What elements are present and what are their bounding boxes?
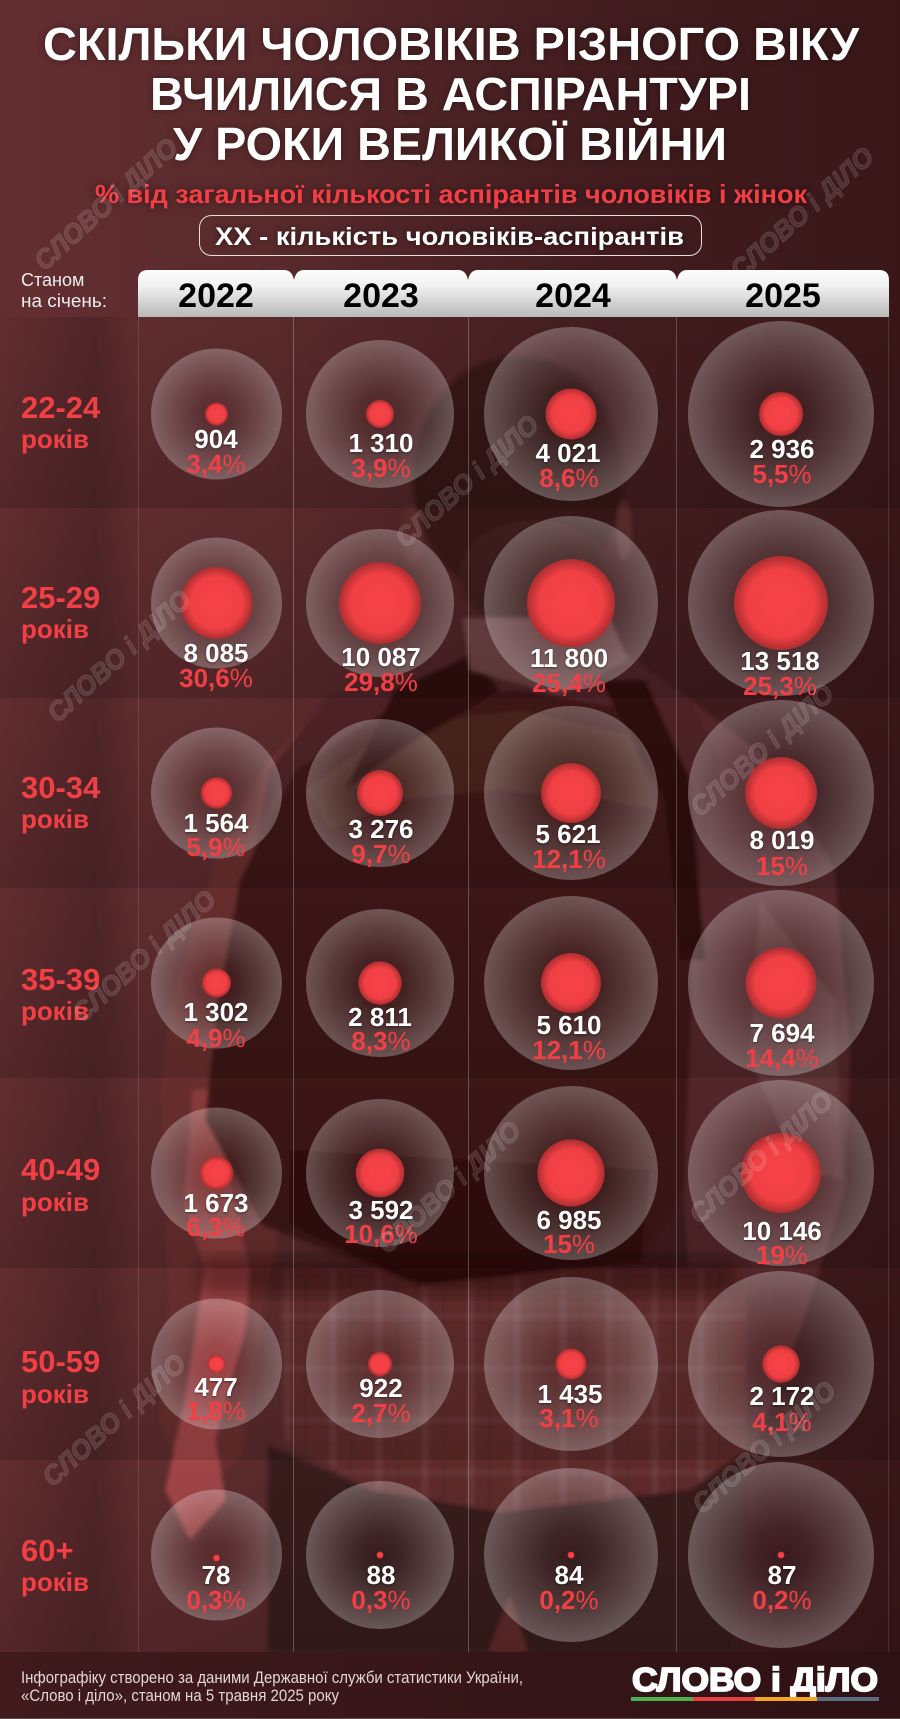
bubble 2022 [151, 1490, 282, 1620]
bubble 2023 [306, 909, 454, 1057]
row 30-34 [21, 700, 874, 886]
subtitle: % від загальної кількості аспірантів чоловіків і жінок [95, 179, 808, 209]
bubble 2022: 8 085 [183, 638, 249, 668]
bubble 2025 [688, 1271, 874, 1457]
bubble 2023 [306, 340, 454, 488]
age label: 30-34 [21, 770, 101, 805]
footer band [0, 1652, 900, 1719]
bubble 2023: 1 310 [348, 428, 414, 458]
bubble 2023 [306, 1290, 454, 1438]
age label [21, 1533, 89, 1597]
watermarks: СЛОВО і ДІЛО [683, 1085, 839, 1229]
age label [21, 770, 101, 834]
bubble 2022: 78 [202, 1560, 230, 1590]
bubble 2025 [688, 1080, 874, 1270]
age label: років [21, 1567, 89, 1597]
bubble 2023: 3,9% [351, 453, 411, 483]
row bands [0, 317, 900, 1652]
bubble 2025: 0,2% [752, 1585, 812, 1615]
bubble 2024: 25,4% [532, 668, 606, 698]
header 2024: 2024 [535, 277, 611, 315]
bubble 2023: 10,6% [344, 1219, 418, 1249]
header 2025 [677, 270, 889, 317]
header 2023 [294, 270, 468, 317]
bubble 2023: 922 [359, 1373, 403, 1403]
bubble 2025: 13 518 [740, 646, 820, 676]
bubble 2025: 5,5% [752, 459, 812, 489]
bubble 2023: 8,3% [351, 1026, 411, 1056]
note: as of January: на січень: [21, 291, 107, 311]
bubble 2024: 6 985 [536, 1205, 602, 1235]
bubble 2022: 904 [194, 424, 238, 454]
title: У РОКИ ВЕЛИКОЇ ВІЙНИ [173, 118, 727, 170]
bubble 2024: 1 435 [537, 1379, 603, 1409]
note: as of January: Станом [21, 270, 84, 290]
bubble 2023: 88 [367, 1560, 395, 1590]
bubble 2024 [484, 516, 658, 698]
bubble 2024: 12,1% [532, 1035, 606, 1065]
bubble 2023 [306, 1099, 454, 1249]
bubble 2024: 4 021 [535, 438, 601, 468]
watermarks: СЛОВО і ДІЛО [28, 132, 184, 276]
age label: років [21, 424, 89, 454]
bubble 2022: 30,6% [179, 663, 253, 693]
row 25-29 [21, 510, 874, 701]
bubble 2025 [688, 700, 874, 886]
age label: 40-49 [21, 1152, 100, 1187]
age label [21, 390, 101, 454]
bubble 2023 [306, 1481, 454, 1629]
bubble 2022: 1,8% [186, 1396, 246, 1426]
bubble 2024: 84 [555, 1560, 584, 1590]
watermarks: СЛОВО і ДІЛО [66, 884, 222, 1028]
bubble 2023 [306, 719, 454, 869]
bubble 2023: 3 592 [348, 1195, 414, 1225]
background photo: student with backpack [160, 356, 850, 1652]
bubble 2023: 2,7% [351, 1398, 411, 1428]
bubble 2025: 14,4% [745, 1043, 819, 1073]
bubble 2022: 6,3% [186, 1212, 246, 1242]
age label: років [21, 804, 89, 834]
bubble 2025: 15% [756, 851, 808, 881]
bubble 2022 [151, 918, 282, 1053]
header 2024 [468, 270, 677, 317]
note: as of January [21, 270, 107, 311]
bubble 2025: 25,3% [743, 671, 817, 701]
age label: 22-24 [21, 390, 101, 425]
age label [21, 1344, 100, 1409]
watermarks: СЛОВО і ДІЛО [684, 678, 840, 822]
watermarks: СЛОВО і ДІЛО [371, 1115, 527, 1259]
bubble 2022: 1 673 [183, 1188, 249, 1218]
bubble 2024 [484, 1277, 658, 1451]
age label: 60+ [21, 1533, 74, 1568]
bubble 2024 [484, 327, 658, 501]
bubble 2024: 8,6% [539, 463, 599, 493]
bubble 2024 [484, 1468, 658, 1642]
bubble 2023: 0,3% [351, 1585, 411, 1615]
bubble 2023: 9,7% [351, 839, 411, 869]
row 40-49 [21, 1080, 874, 1270]
bubble 2022: 1 302 [183, 997, 249, 1027]
age label: років [21, 1187, 89, 1217]
bubble 2022: 5,9% [186, 832, 246, 862]
bubble 2022 [151, 348, 282, 480]
bubble 2022 [151, 1108, 282, 1242]
bubble 2025 [688, 1462, 874, 1648]
year header [138, 270, 889, 317]
age label [21, 962, 100, 1026]
legend [200, 216, 702, 256]
source note [21, 1668, 523, 1705]
age label: 25-29 [21, 580, 100, 615]
bubble 2022: 4,9% [186, 1023, 246, 1053]
watermarks: СЛОВО і ДІЛО [41, 584, 197, 728]
watermarks: СЛОВО і ДІЛО [724, 141, 880, 285]
bubble 2023: 2 811 [348, 1002, 412, 1032]
row 50-59 [21, 1271, 874, 1457]
bubble 2024: 3,1% [539, 1403, 599, 1433]
bubble 2022: 3,4% [186, 449, 246, 479]
bubble 2022: 1 564 [183, 808, 249, 838]
age label: років [21, 1379, 89, 1409]
bubble 2025 [688, 890, 874, 1076]
age label: років [21, 614, 89, 644]
watermarks [28, 132, 880, 1519]
bubble 2024: 11 800 [530, 643, 608, 673]
title [43, 18, 860, 170]
title: СКІЛЬКИ ЧОЛОВІКІВ РІЗНОГО ВІКУ [43, 18, 860, 70]
bubble 2024: 0,2% [539, 1585, 599, 1615]
age label [21, 580, 100, 644]
title: ВЧИЛИСЯ В АСПІРАНТУРІ [150, 68, 751, 120]
bubble 2023 [306, 529, 454, 697]
bubble 2024: 12,1% [532, 844, 606, 874]
bubble 2025: 19% [756, 1240, 808, 1270]
row 35-39 [21, 890, 874, 1076]
logo: СЛОВО і ДіЛО [632, 1661, 878, 1698]
bubble 2023: 10 087 [341, 642, 421, 672]
bubble 2022 [151, 538, 282, 693]
row 22-24 [21, 321, 874, 507]
watermarks: СЛОВО і ДІЛО [686, 1375, 842, 1519]
bubble 2025: 8 019 [749, 825, 815, 855]
bubble 2024: 5 610 [536, 1010, 602, 1040]
header 2023: 2023 [343, 277, 419, 315]
bubble 2025 [688, 321, 874, 507]
row 60+ [21, 1462, 874, 1648]
age label: років [21, 996, 89, 1026]
age label [21, 1152, 100, 1217]
bubble 2025: 87 [768, 1560, 796, 1590]
legend: XX - кількість чоловіків-аспірантів [215, 223, 684, 251]
age label: 35-39 [21, 962, 100, 997]
bubble 2025: 2 936 [749, 434, 815, 464]
watermarks: СЛОВО і ДІЛО [389, 409, 545, 553]
bubble 2024: 5 621 [535, 819, 601, 849]
bubble 2022 [151, 728, 282, 862]
age label: 50-59 [21, 1344, 100, 1379]
bubble 2022 [151, 1298, 282, 1430]
bubble 2024 [484, 706, 658, 880]
bubble 2024 [484, 1086, 658, 1260]
bubble 2025: 10 146 [742, 1216, 822, 1246]
bubble 2024: 15% [543, 1229, 595, 1259]
watermarks: СЛОВО і ДІЛО [36, 1348, 192, 1492]
bubble 2022: 477 [194, 1372, 238, 1402]
bubble 2022: 0,3% [186, 1585, 246, 1615]
bubble 2023: 29,8% [344, 667, 418, 697]
bubble 2024 [484, 896, 658, 1070]
bubble 2025 [688, 510, 874, 701]
bubble 2025: 7 694 [749, 1018, 815, 1048]
bubble 2025: 4,1% [752, 1407, 812, 1437]
header 2022: 2022 [178, 277, 254, 315]
bubble 2025: 2 172 [749, 1381, 815, 1411]
source note: «Слово і діло», станом на 5 травня 2025 року [21, 1686, 339, 1705]
header 2022 [138, 270, 294, 317]
header 2025: 2025 [745, 277, 821, 315]
bubble 2023: 3 276 [348, 814, 414, 844]
source note: Інфографіку створено за даними Державної служби статистики України, [21, 1668, 523, 1687]
